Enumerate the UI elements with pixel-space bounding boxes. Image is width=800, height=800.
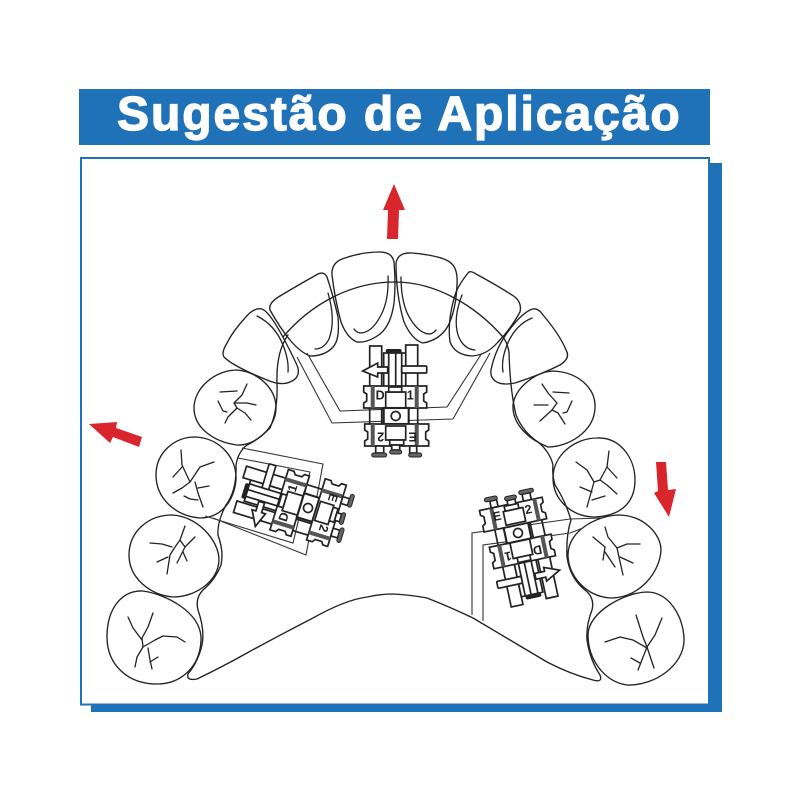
palate arc across incisors — [283, 282, 503, 337]
tooth: right lateral incisor — [449, 272, 520, 356]
title banner — [79, 88, 710, 145]
expander: left: E — [325, 492, 341, 504]
expander: anterior: D — [376, 388, 385, 402]
tooth: left canine — [223, 309, 298, 384]
dental arch drawing — [107, 252, 684, 685]
expander: right: 2 — [524, 502, 533, 517]
left plate wires — [205, 448, 323, 555]
tooth: left molar 1 — [107, 591, 201, 684]
expander: right — [477, 486, 565, 609]
tooth: left lateral incisor — [270, 273, 338, 356]
arrow: red up — [383, 184, 405, 239]
tooth: right premolar 1 — [513, 371, 595, 447]
expander: anterior: 2 — [377, 430, 384, 444]
tooth: left central incisor — [332, 252, 395, 342]
expander: right: E — [492, 509, 503, 524]
arrow on expander — [534, 564, 561, 583]
title text: Sugestão de Aplicação — [117, 88, 682, 141]
expander: left: 1 — [285, 483, 300, 494]
expander: left: D — [276, 510, 292, 523]
right plate wires — [472, 518, 603, 621]
tooth: left molar 2 — [129, 515, 219, 597]
expander: anterior — [363, 345, 429, 457]
panel: framed diagram with drop shadow — [81, 158, 722, 712]
expander: left: 2 — [316, 523, 331, 534]
arrow on expander — [363, 363, 388, 377]
expander: anterior: 1 — [407, 388, 414, 402]
tooth: left premolar 2 — [194, 370, 276, 445]
tooth: right molar 1 — [568, 515, 661, 598]
arrow on expander — [248, 500, 268, 528]
palate outline — [188, 335, 601, 681]
arrow: red left — [89, 422, 142, 447]
tooth: right canine — [491, 309, 568, 384]
tooth: left premolar 1 — [156, 437, 236, 518]
expander: anterior: E — [409, 430, 417, 444]
anterior plate wires — [297, 353, 490, 423]
expander: left — [230, 456, 357, 552]
arrow: red down — [654, 462, 676, 517]
expander: right: 1 — [503, 548, 513, 564]
tooth: right molar 2 — [588, 592, 684, 685]
tooth: right central incisor — [396, 253, 457, 343]
tooth: right premolar 2 — [553, 438, 635, 517]
expander: right: D — [532, 542, 543, 558]
